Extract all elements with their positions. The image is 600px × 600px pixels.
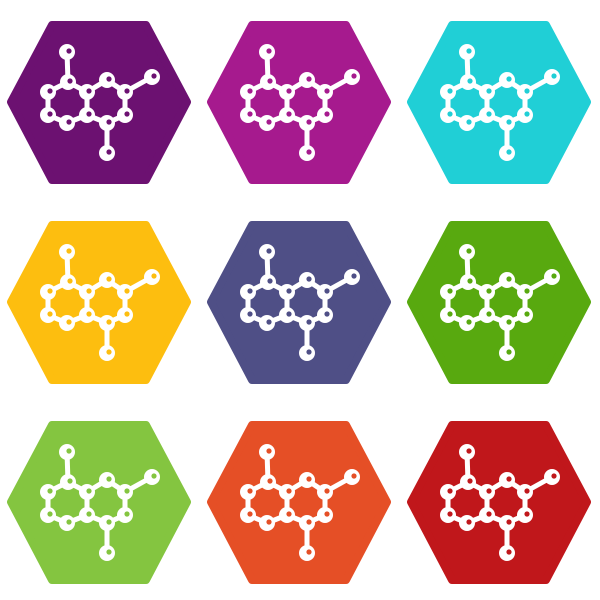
tile: cyan [411,25,587,180]
tile: red [411,425,587,580]
tile: green [411,225,587,380]
tile: slate [211,225,387,380]
tile: purple [11,25,187,180]
tile: magenta [211,25,387,180]
tile: orange [211,425,387,580]
tile: light green [11,425,187,580]
tile: yellow [11,225,187,380]
